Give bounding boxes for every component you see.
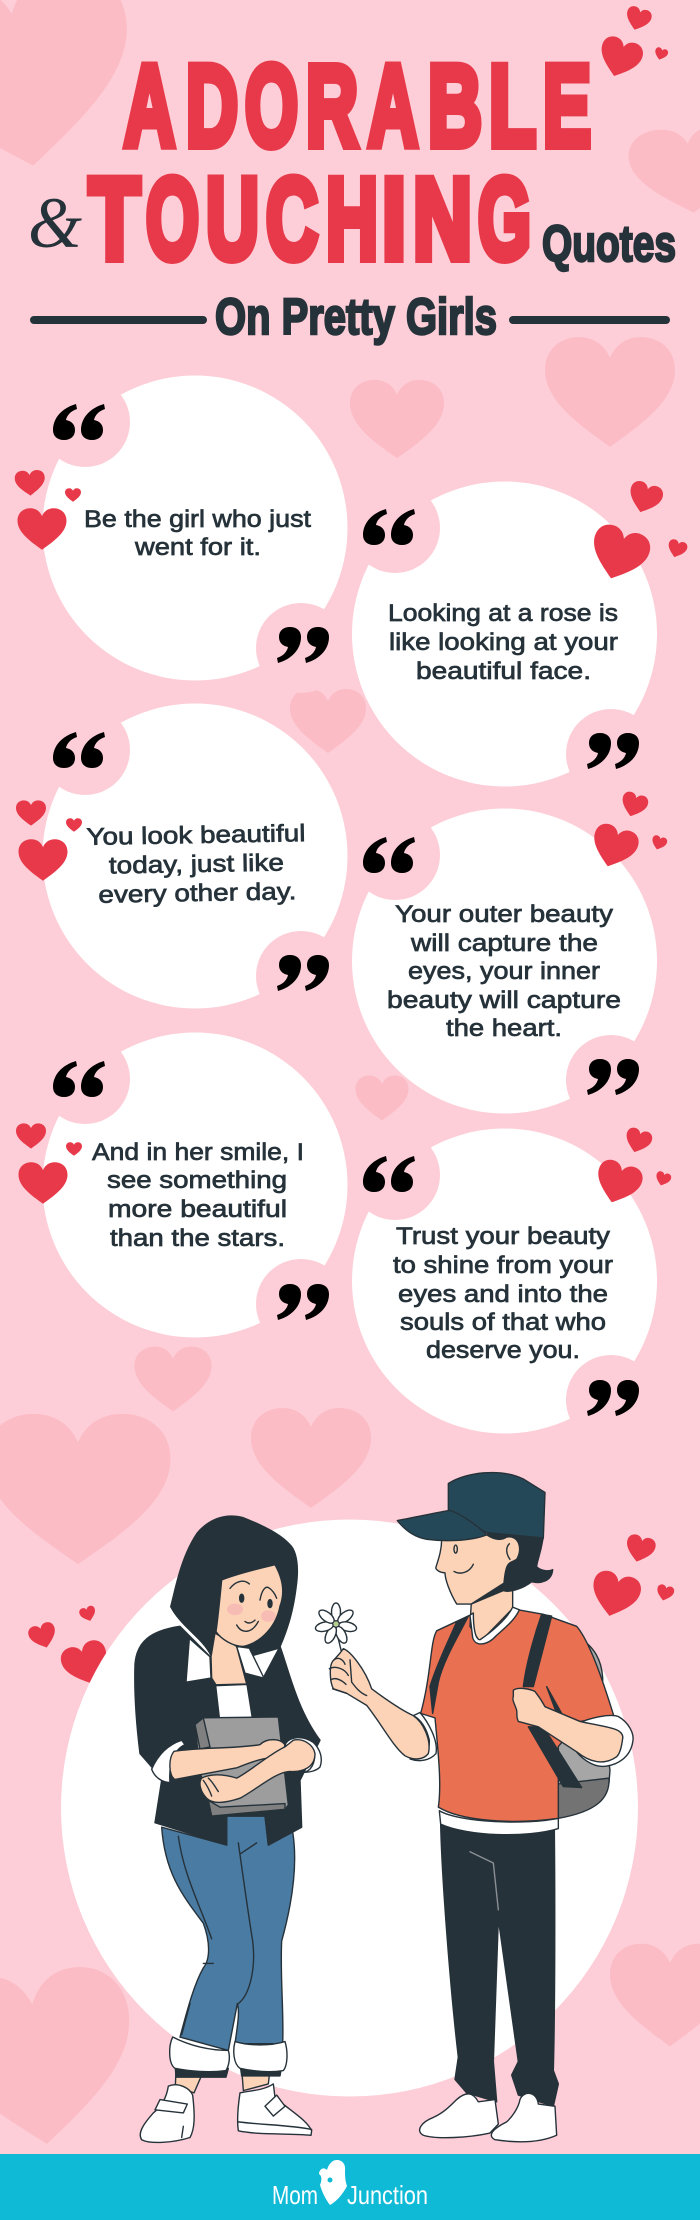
panel: quote 4: will capture the [410, 930, 598, 957]
panel: quote 1: Be the girl who just [84, 506, 311, 533]
title: Adorable and Touching Quotes: A [124, 42, 175, 170]
panel: quote 2 [350, 482, 657, 799]
title: Adorable and Touching Quotes: L [489, 42, 536, 170]
title: Adorable and Touching Quotes: O [146, 156, 199, 284]
title: Adorable and Touching Quotes: G [478, 156, 531, 284]
panel: quote 5 [40, 1032, 348, 1349]
panel: quote 2: Looking at a rose is [388, 600, 618, 627]
title: Adorable and Touching Quotes: H [326, 156, 378, 284]
title: Adorable and Touching Quotes: B [428, 42, 482, 170]
panel: quote 3: every other day. [98, 878, 297, 909]
title: Adorable and Touching Quotes: T [89, 156, 140, 284]
title: Adorable and Touching Quotes: D [186, 42, 238, 170]
panel: quote 5: And in her smile, I [92, 1139, 304, 1166]
panel: quote 1: went for it. [134, 534, 261, 561]
panel: quote 6: souls of that who [400, 1309, 606, 1336]
illustration: boy with backpack [329, 1473, 633, 2142]
panel: quote 4: Your outer beauty [395, 901, 613, 928]
title: Adorable and Touching Quotes: A [368, 42, 418, 170]
logo: MomJunction: Mom [272, 2180, 318, 2210]
title: Adorable and Touching Quotes: R [306, 42, 358, 170]
title: Adorable and Touching Quotes: & [28, 183, 82, 263]
title: Adorable and Touching Quotes: I [382, 156, 406, 284]
panel: quote 5: than the stars. [110, 1225, 285, 1252]
panel: quote 3: You look beautiful [86, 820, 306, 851]
title: Adorable and Touching Quotes: N [413, 156, 472, 284]
title: Adorable and Touching Quotes: C [266, 156, 318, 284]
panel: quote 6: eyes and into the [398, 1281, 608, 1308]
title: Adorable and Touching Quotes: O [245, 42, 298, 170]
panel: quote 1 [40, 376, 348, 693]
panel: quote 4 [350, 808, 657, 1125]
panel: quote 5: see something [107, 1167, 287, 1194]
icon: daisy flower [315, 1603, 357, 1654]
illustration: girl holding book [135, 1515, 321, 2142]
panel: quote 6: deserve you. [426, 1337, 580, 1364]
panel: quote 6 [350, 1128, 657, 1445]
title: Adorable and Touching Quotes: E [543, 42, 591, 170]
panel: quote 3: today, just like [109, 849, 284, 880]
red hearts [14, 4, 689, 1691]
subtitle: On Pretty Girls with rules: On Pretty Girls [215, 288, 497, 345]
panel: quote 6: to shine from your [393, 1252, 613, 1279]
footer bar [0, 2154, 700, 2220]
panel: quote 4: beauty will capture [387, 987, 621, 1014]
panel: quote 4: eyes, your inner [408, 958, 600, 985]
panel: quote 5: more beautiful [108, 1196, 287, 1223]
subtitle: On Pretty Girls with rules [30, 288, 670, 345]
panel: quote 4: the heart. [446, 1015, 562, 1042]
large white circle behind couple [61, 1520, 638, 2096]
panel: quote 6: Trust your beauty [396, 1223, 610, 1250]
title: Adorable and Touching Quotes [28, 42, 676, 284]
logo: MomJunction [272, 2160, 428, 2210]
panel: quote 3 [40, 704, 348, 1021]
logo: MomJunction: Junction [347, 2180, 428, 2210]
panel: quote 2: beautiful face. [416, 658, 591, 685]
panel: quote 2: like looking at your [389, 629, 618, 656]
title: Adorable and Touching Quotes: U [206, 156, 259, 284]
